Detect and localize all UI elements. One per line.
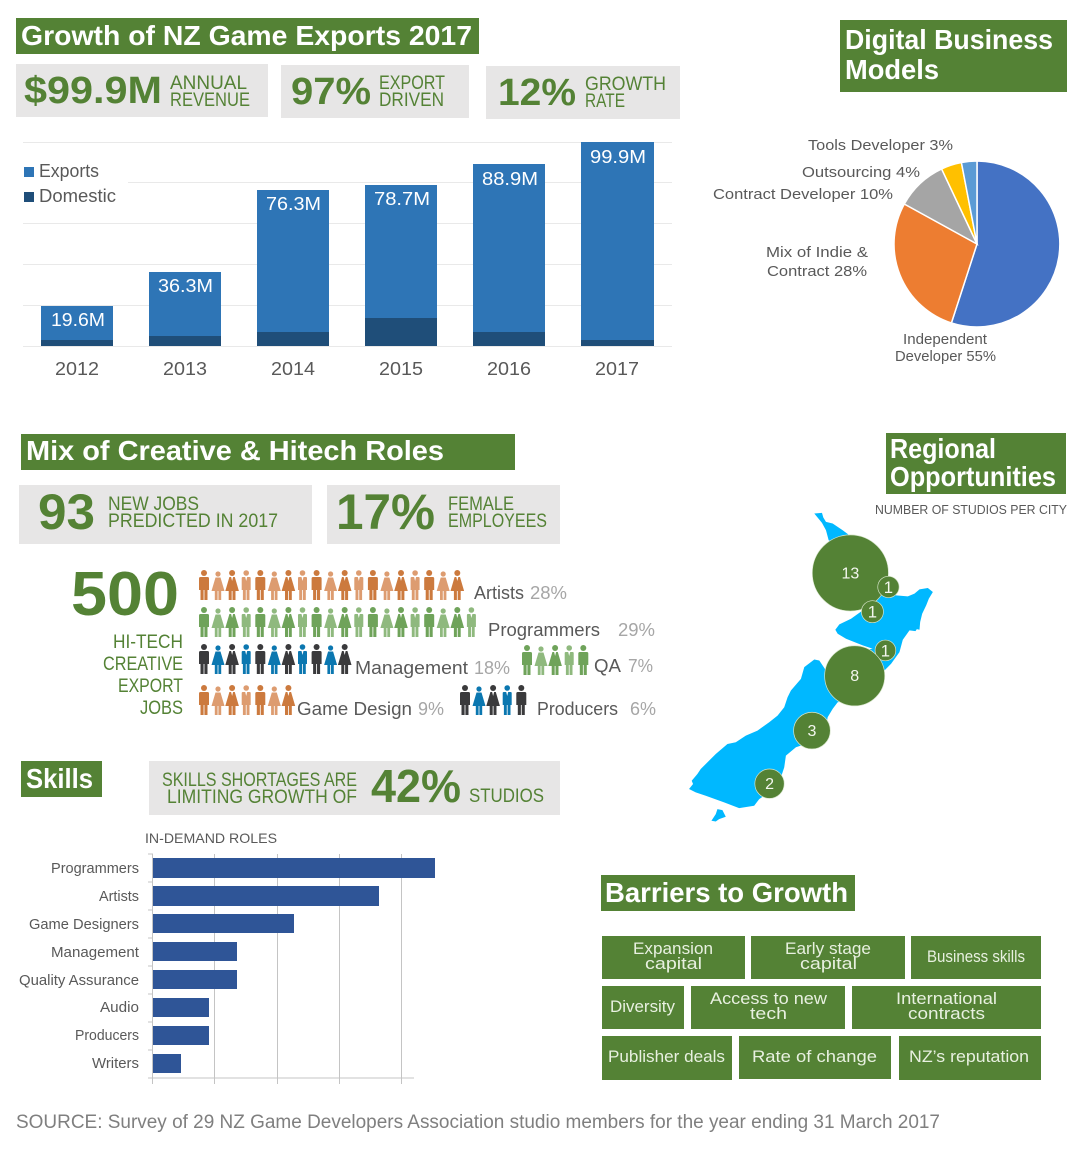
pictogram: QA: [522, 645, 588, 675]
stat: skills shortages: LIMITING GROWTH OF: [167, 787, 357, 808]
label: artists: [474, 583, 567, 603]
bar: audio: Audio: [100, 999, 139, 1016]
label: QA: 7%: [628, 656, 653, 676]
bar: management: Management: [51, 944, 140, 961]
bar chart: in-demand roles: [19, 854, 435, 1084]
bar: artists: [99, 886, 379, 906]
stat: 500 jobs: CREATIVE: [103, 654, 183, 675]
stat: female employees: [327, 484, 560, 544]
panel: creative and hitech roles: [19, 434, 656, 719]
bar 2016: [473, 164, 545, 379]
map subtitle: NUMBER OF STUDIOS PER CITY: [875, 502, 1067, 517]
bubble: 1 studio: 1: [881, 641, 890, 660]
bar 2013: 36.3M: [158, 276, 213, 296]
bar: quality assurance: [19, 970, 237, 989]
stat: annual revenue: [16, 64, 268, 117]
pie labels: Developer 55%: [895, 348, 996, 365]
chart title: IN-DEMAND ROLES: [145, 830, 277, 846]
panel: growth of exports: [16, 18, 680, 379]
heading: digital business models: Digital Business: [845, 24, 1053, 55]
heading: digital business models: Models: [845, 54, 939, 85]
panel: skills: [19, 760, 560, 1084]
stat: export driven: [281, 65, 469, 118]
stat: female employees: EMPLOYEES: [448, 511, 547, 532]
barrier: international contracts: contracts: [908, 1004, 985, 1023]
bar 2017: [581, 142, 654, 379]
bubble: 8 studios: 8: [850, 667, 859, 685]
map: New Zealand: [689, 513, 933, 821]
bar 2013: [149, 272, 221, 379]
barrier: diversity: [602, 986, 684, 1029]
bar 2012: 19.6M: [51, 310, 105, 330]
stat: export driven: EXPORT: [379, 73, 445, 94]
legend: [24, 161, 116, 206]
pictogram: management: [199, 644, 352, 674]
bar: programmers: [51, 858, 435, 878]
bar 2013: 2013: [163, 359, 207, 379]
barrier: NZ's reputation: NZ’s reputation: [909, 1047, 1029, 1066]
label: producers: 6%: [630, 699, 656, 719]
bubble: 1 studio: [875, 640, 896, 661]
bar: audio: [100, 998, 209, 1017]
bar 2017: 99.9M: [590, 147, 646, 167]
bar: writers: [92, 1054, 181, 1073]
barrier: diversity: Diversity: [610, 997, 675, 1016]
stat: 500 jobs: 500: [71, 560, 179, 629]
barrier: publisher deals: Publisher deals: [608, 1047, 725, 1066]
heading: skills: Skills: [26, 763, 93, 794]
label: game design: Game Design: [297, 699, 412, 719]
panel: barriers to growth: [601, 875, 1041, 1080]
bar chart: revenue by year: [23, 142, 672, 379]
barrier: international contracts: International: [896, 989, 997, 1008]
bubble: 2 studios: 2: [765, 775, 774, 793]
bar 2016: 2016: [487, 359, 531, 379]
bar: management: [51, 942, 237, 961]
label: producers: [537, 699, 656, 719]
label: programmers: [488, 620, 655, 640]
bar: game designers: [29, 914, 294, 933]
pie labels: Mix of Indie &: [766, 244, 868, 261]
bar: producers: [75, 1026, 209, 1045]
bubble: 1 studio: [878, 576, 899, 598]
label: management: 18%: [474, 658, 510, 678]
bubble: 1 studio: 1: [884, 578, 893, 597]
barrier: NZ's reputation: [899, 1036, 1041, 1080]
bar: artists: Artists: [99, 888, 139, 905]
label: producers: Producers: [537, 699, 618, 719]
stat: new jobs: NEW JOBS: [108, 494, 199, 515]
stat: annual revenue: ANNUAL: [170, 73, 247, 94]
pie labels: Independent: [903, 331, 988, 348]
heading: mix of creative and hitech roles: Mix of Creative & Hitech Roles: [26, 435, 444, 466]
barrier: access to new tech: Access to new: [710, 989, 828, 1008]
bar: writers: Writers: [92, 1055, 139, 1072]
pictogram: artists: [199, 570, 464, 600]
barrier: business skills: [911, 936, 1041, 979]
barrier: access to new tech: [691, 986, 845, 1029]
label: artists: 28%: [530, 583, 567, 603]
stat: export driven: DRIVEN: [379, 90, 444, 111]
stat: female employees: FEMALE: [448, 494, 514, 515]
barrier: business skills: Business skills: [927, 947, 1025, 966]
label: management: Management: [355, 658, 468, 678]
panel: digital business models: [713, 20, 1067, 365]
pie labels: Outsourcing 4%: [802, 164, 920, 181]
bar 2015: 2015: [379, 359, 423, 379]
bubble: 13 studios: 13: [841, 564, 859, 582]
bubble: 3 studios: 3: [807, 722, 816, 740]
stat: 500 jobs: HI-TECH: [113, 632, 183, 653]
stat: 500 jobs: EXPORT: [118, 676, 183, 697]
bar 2015: 78.7M: [374, 189, 430, 209]
stat: annual revenue: $99.9M: [24, 70, 162, 112]
bar 2016: 88.9M: [482, 169, 538, 189]
stat: annual revenue: REVENUE: [170, 90, 250, 111]
bubble: 8 studios: [825, 646, 885, 706]
label: game design: 9%: [418, 699, 444, 719]
stat: skills shortages: [149, 760, 560, 815]
barrier: international contracts: [852, 986, 1041, 1029]
bar: game designers: Game Designers: [29, 916, 139, 933]
bubble: 3 studios: [794, 712, 830, 749]
bar 2012: 2012: [55, 359, 99, 379]
pie labels: [713, 137, 996, 365]
barrier: rate of change: Rate of change: [752, 1047, 877, 1066]
barrier: early stage capital: Early stage: [785, 939, 871, 958]
heading: regional opportunities: Opportunities: [890, 461, 1056, 492]
stat: skills shortages: 42%: [371, 760, 461, 812]
heading: growth of NZ game exports: Growth of NZ Game Exports 2017: [21, 20, 472, 51]
bar: programmers: Programmers: [51, 860, 139, 877]
source note: SOURCE: Survey of 29 NZ Game Developers Association studio members for the year ending 31 March 2017: [16, 1112, 940, 1133]
label: QA: QA: [594, 656, 621, 676]
bar: producers: Producers: [75, 1027, 139, 1044]
pie chart: [894, 161, 1060, 327]
stat: 500 jobs: [71, 560, 183, 719]
label: programmers: Programmers: [488, 620, 600, 640]
barrier: rate of change: [739, 1036, 891, 1079]
pictogram: producers: [460, 685, 526, 715]
bar 2014: 2014: [271, 359, 315, 379]
barrier: early stage capital: capital: [800, 954, 857, 973]
bar 2014: [257, 190, 329, 379]
bubble: 13 studios: [812, 535, 888, 611]
stat: 500 jobs: JOBS: [140, 698, 183, 719]
stat: new jobs: [19, 484, 312, 544]
legend: Domestic: [39, 186, 116, 206]
stat: growth rate: RATE: [585, 91, 625, 112]
label: artists: Artists: [474, 583, 524, 603]
bubble: 1 studio: 1: [868, 603, 877, 622]
legend: Exports: [39, 161, 99, 181]
bar 2015: [365, 185, 437, 379]
stat: skills shortages: SKILLS SHORTAGES ARE: [162, 770, 357, 791]
barrier: publisher deals: [602, 1036, 732, 1080]
pictogram: game design: [199, 685, 295, 715]
stat: new jobs: 93: [38, 484, 95, 540]
stat: growth rate: 12%: [498, 72, 576, 114]
bar 2012: [41, 306, 113, 379]
heading: barriers to growth: Barriers to Growth: [605, 877, 848, 908]
pie labels: Tools Developer 3%: [808, 137, 953, 154]
barrier: early stage capital: [751, 936, 905, 979]
stat: export driven: 97%: [291, 71, 371, 113]
barrier: expansion capital: Expansion: [633, 939, 713, 958]
label: management: [355, 658, 510, 678]
stat: skills shortages: STUDIOS: [469, 786, 544, 807]
heading: regional opportunities: [886, 433, 1066, 494]
barrier: expansion capital: [602, 936, 745, 979]
stat: growth rate: [486, 66, 680, 119]
stat: growth rate: GROWTH: [585, 74, 666, 95]
pie labels: Contract 28%: [767, 263, 867, 280]
bubble: 1 studio: [861, 601, 883, 623]
pie labels: Contract Developer 10%: [713, 186, 893, 203]
heading: digital business models: [840, 20, 1067, 92]
label: QA: [594, 656, 653, 676]
barrier: expansion capital: capital: [645, 954, 702, 973]
label: programmers: 29%: [618, 620, 655, 640]
heading: regional opportunities: Regional: [890, 433, 996, 464]
bar 2014: 76.3M: [266, 194, 321, 214]
barrier: access to new tech: tech: [750, 1004, 787, 1023]
stat: new jobs: PREDICTED IN 2017: [108, 511, 278, 532]
bar 2017: 2017: [595, 359, 639, 379]
stat: female employees: 17%: [336, 484, 435, 540]
pictogram: programmers: [199, 607, 476, 637]
bubble: 2 studios: [755, 769, 784, 798]
bar: quality assurance: Quality Assurance: [19, 972, 139, 989]
panel: regional opportunities: [689, 433, 1067, 821]
